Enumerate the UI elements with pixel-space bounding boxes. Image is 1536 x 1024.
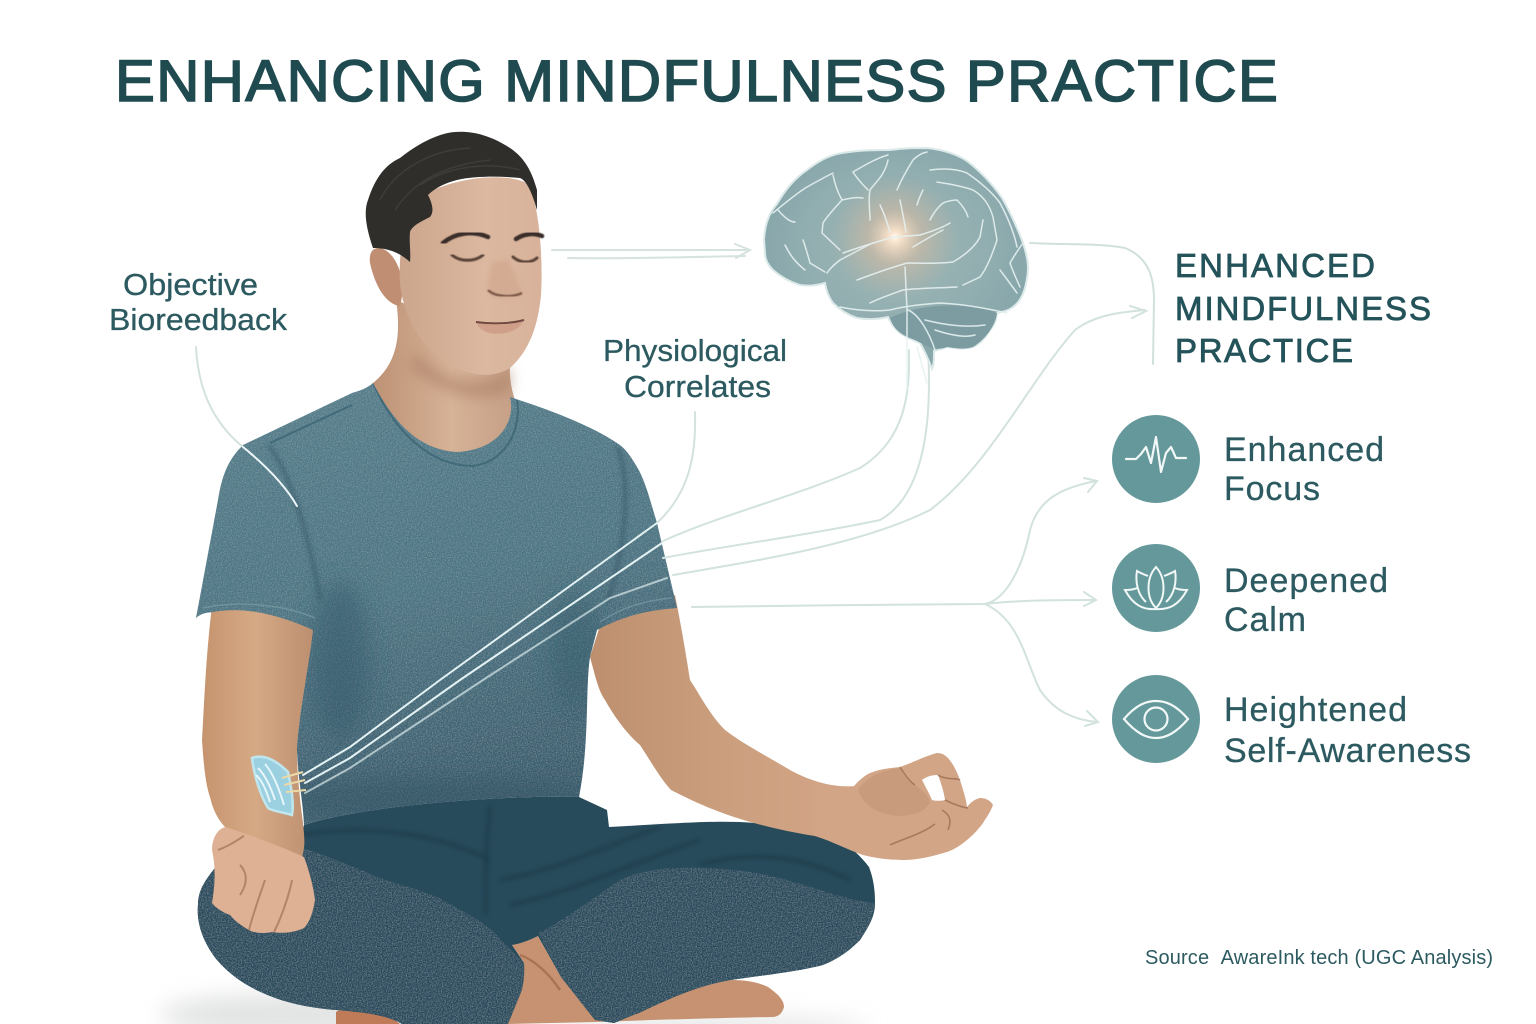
heading: enhanced mindfulness practice: PRACTICE xyxy=(1175,332,1353,369)
title: ENHANCING MINDFULNESS PRACTICE xyxy=(115,50,1278,114)
meditating person xyxy=(160,132,993,1024)
text xyxy=(1224,431,1384,508)
leader: physiological correlates xyxy=(657,412,695,523)
left hand xyxy=(212,827,315,933)
white lines across shirt xyxy=(303,523,667,793)
heading: enhanced mindfulness practice: ENHANCED xyxy=(1175,247,1375,284)
text xyxy=(1224,562,1388,639)
shirt shading xyxy=(203,383,672,824)
left arm xyxy=(202,590,320,857)
arrows: to benefits xyxy=(692,478,1098,726)
hair xyxy=(366,132,537,262)
biosensor patch on forearm xyxy=(252,757,306,815)
text: Focus xyxy=(1224,470,1320,508)
label: objective biofeedback: Objective xyxy=(123,267,258,302)
icon: heartbeat xyxy=(1112,415,1200,503)
brain silhouette xyxy=(764,148,1028,369)
heading: enhanced mindfulness practice: MINDFULNESS xyxy=(1175,290,1431,327)
heading: enhanced mindfulness practice xyxy=(1175,247,1431,369)
central glow xyxy=(833,175,957,299)
source note: Source AwareInk tech (UGC Analysis) xyxy=(1145,947,1493,969)
finger ring opening xyxy=(922,775,945,801)
nose xyxy=(487,260,522,298)
arrow: face to brain xyxy=(552,244,750,258)
right thigh xyxy=(538,867,875,1023)
label: objective biofeedback: Bioreedback xyxy=(109,302,288,337)
benefit: enhanced focus xyxy=(1112,415,1384,508)
sensor glow xyxy=(252,757,293,815)
floor shadow xyxy=(160,995,870,1024)
brain illustration xyxy=(764,148,1028,390)
cerebellum xyxy=(890,305,997,349)
text xyxy=(1224,691,1471,770)
pants xyxy=(198,797,875,1024)
label: physiological correlates: Correlates xyxy=(624,369,771,404)
label: objective biofeedback xyxy=(109,267,288,337)
curves: shirt to brain xyxy=(663,306,1146,575)
icon: eye xyxy=(1112,675,1200,763)
text: Deepened xyxy=(1224,562,1388,600)
brain folds xyxy=(773,152,1023,390)
mouth xyxy=(476,320,524,334)
text: Heightened xyxy=(1224,691,1407,729)
line: brain to enhanced practice xyxy=(1030,243,1154,364)
right arm xyxy=(590,595,860,838)
icon: lotus xyxy=(1112,544,1200,632)
thumb base shading xyxy=(858,768,930,816)
neck xyxy=(373,300,515,470)
benefit: heightened self-awareness xyxy=(1112,675,1471,770)
right hand xyxy=(815,753,993,860)
benefit: deepened calm xyxy=(1112,544,1388,639)
ear xyxy=(370,248,402,306)
connector lines xyxy=(196,243,1154,793)
label: physiological correlates: Physiological xyxy=(603,333,787,368)
shin and near foot xyxy=(508,936,784,1024)
pants base xyxy=(198,797,875,1024)
text: Enhanced xyxy=(1224,431,1384,469)
far foot xyxy=(336,1008,400,1024)
neck shadow xyxy=(410,350,512,398)
leader: objective biofeedback xyxy=(196,347,243,447)
eyebrows xyxy=(443,233,542,243)
text: Self-Awareness xyxy=(1224,732,1471,770)
fabric folds xyxy=(300,806,850,915)
text: Calm xyxy=(1224,601,1306,639)
label: physiological correlates xyxy=(603,333,787,404)
face xyxy=(400,177,542,375)
left thigh xyxy=(198,847,524,1024)
closed eyes xyxy=(452,255,537,262)
shirt xyxy=(196,383,677,825)
